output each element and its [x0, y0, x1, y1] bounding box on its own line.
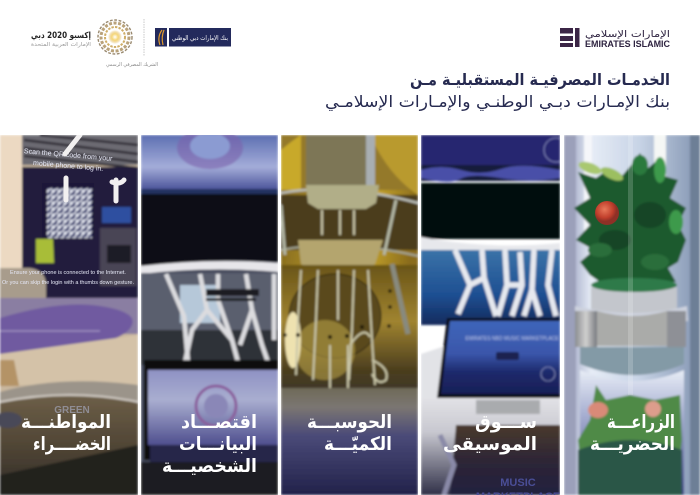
Emirates Islamic Arabic name: الإمارات الإسلامي: [585, 29, 670, 40]
icon: Emirates Islamic mark: [560, 28, 580, 47]
table lettering: GREEN: [54, 405, 90, 416]
panel: green citizenship: [0, 135, 138, 495]
label: [21, 412, 111, 455]
tomato: [595, 201, 619, 225]
label: المواطنـــة: [21, 412, 111, 433]
photo: QR login kiosk: [0, 135, 138, 495]
screen caption: Or you can skip the login with a thumbs down gesture.: [2, 280, 135, 286]
icon: NBD mark: [155, 28, 167, 46]
light streak: [628, 135, 633, 395]
Expo Arabic name: إكسبو 2020 دبي: [31, 31, 91, 41]
Expo country line: الإمارات العربية المتحدة: [31, 42, 92, 48]
Emirates Islamic English name: EMIRATES ISLAMIC: [585, 38, 670, 49]
logo: Expo 2020: [31, 20, 158, 68]
panel: personal data economy: [141, 127, 278, 495]
label: الزراعـــة: [607, 412, 675, 433]
title: [325, 70, 670, 112]
label: الموسيقى: [443, 434, 537, 455]
label: [444, 416, 536, 454]
label: [590, 412, 675, 455]
label: البيانـــات: [179, 434, 257, 455]
panel: quantum computing: [281, 135, 418, 495]
title line one: الخدمـات المصرفيـة المستقبليـة مـن: [410, 70, 670, 89]
panel: music marketplace: [421, 135, 568, 495]
photo: music kiosk: [421, 135, 568, 495]
icon: Expo emblem: [98, 20, 132, 54]
kiosk lettering: MUSIC: [500, 477, 536, 489]
photo: vertical farm: [564, 135, 700, 495]
screen caption: Scan the QR code from your: [24, 148, 113, 163]
decorative marks: [65, 135, 124, 201]
label: ســـوق: [475, 412, 537, 433]
logo: Emirates Islamic: [560, 28, 670, 49]
NBD Arabic name: بنك الإمارات دبي الوطني: [172, 35, 228, 42]
screen caption: [2, 148, 135, 286]
label: الحوسبـــة: [307, 412, 392, 433]
photo: music kiosk: EMIRATES NBD MUSIC MARKETPLACE: [465, 336, 559, 342]
logo: Emirates NBD: [155, 28, 231, 46]
label: الحضريـــة: [590, 434, 675, 455]
Expo partner caption: الشريك المصرفي الرسمي: [106, 62, 158, 68]
photo: quantum chandelier: [281, 135, 418, 495]
divider: [143, 19, 145, 56]
NBD name box: [169, 28, 231, 46]
label: [308, 414, 391, 453]
screen caption: mobile phone to log in.: [33, 160, 104, 173]
label: الخضــــراء: [33, 434, 111, 455]
screen caption: Ensure your phone is connected to the Internet.: [10, 270, 126, 276]
label: [162, 412, 257, 477]
panel: urban farming: [564, 135, 700, 495]
kiosk lettering: [476, 477, 560, 495]
photo: data wall and tablet: [141, 127, 278, 495]
label: اقتصـــاد: [181, 412, 257, 433]
label: الشخصيـــة: [162, 456, 257, 477]
foliage: [574, 153, 686, 282]
label: الكميّـــة: [324, 434, 392, 455]
title line two: بنك الإمـارات دبـي الوطنـي والإمـارات الإسلامـي: [325, 92, 670, 112]
